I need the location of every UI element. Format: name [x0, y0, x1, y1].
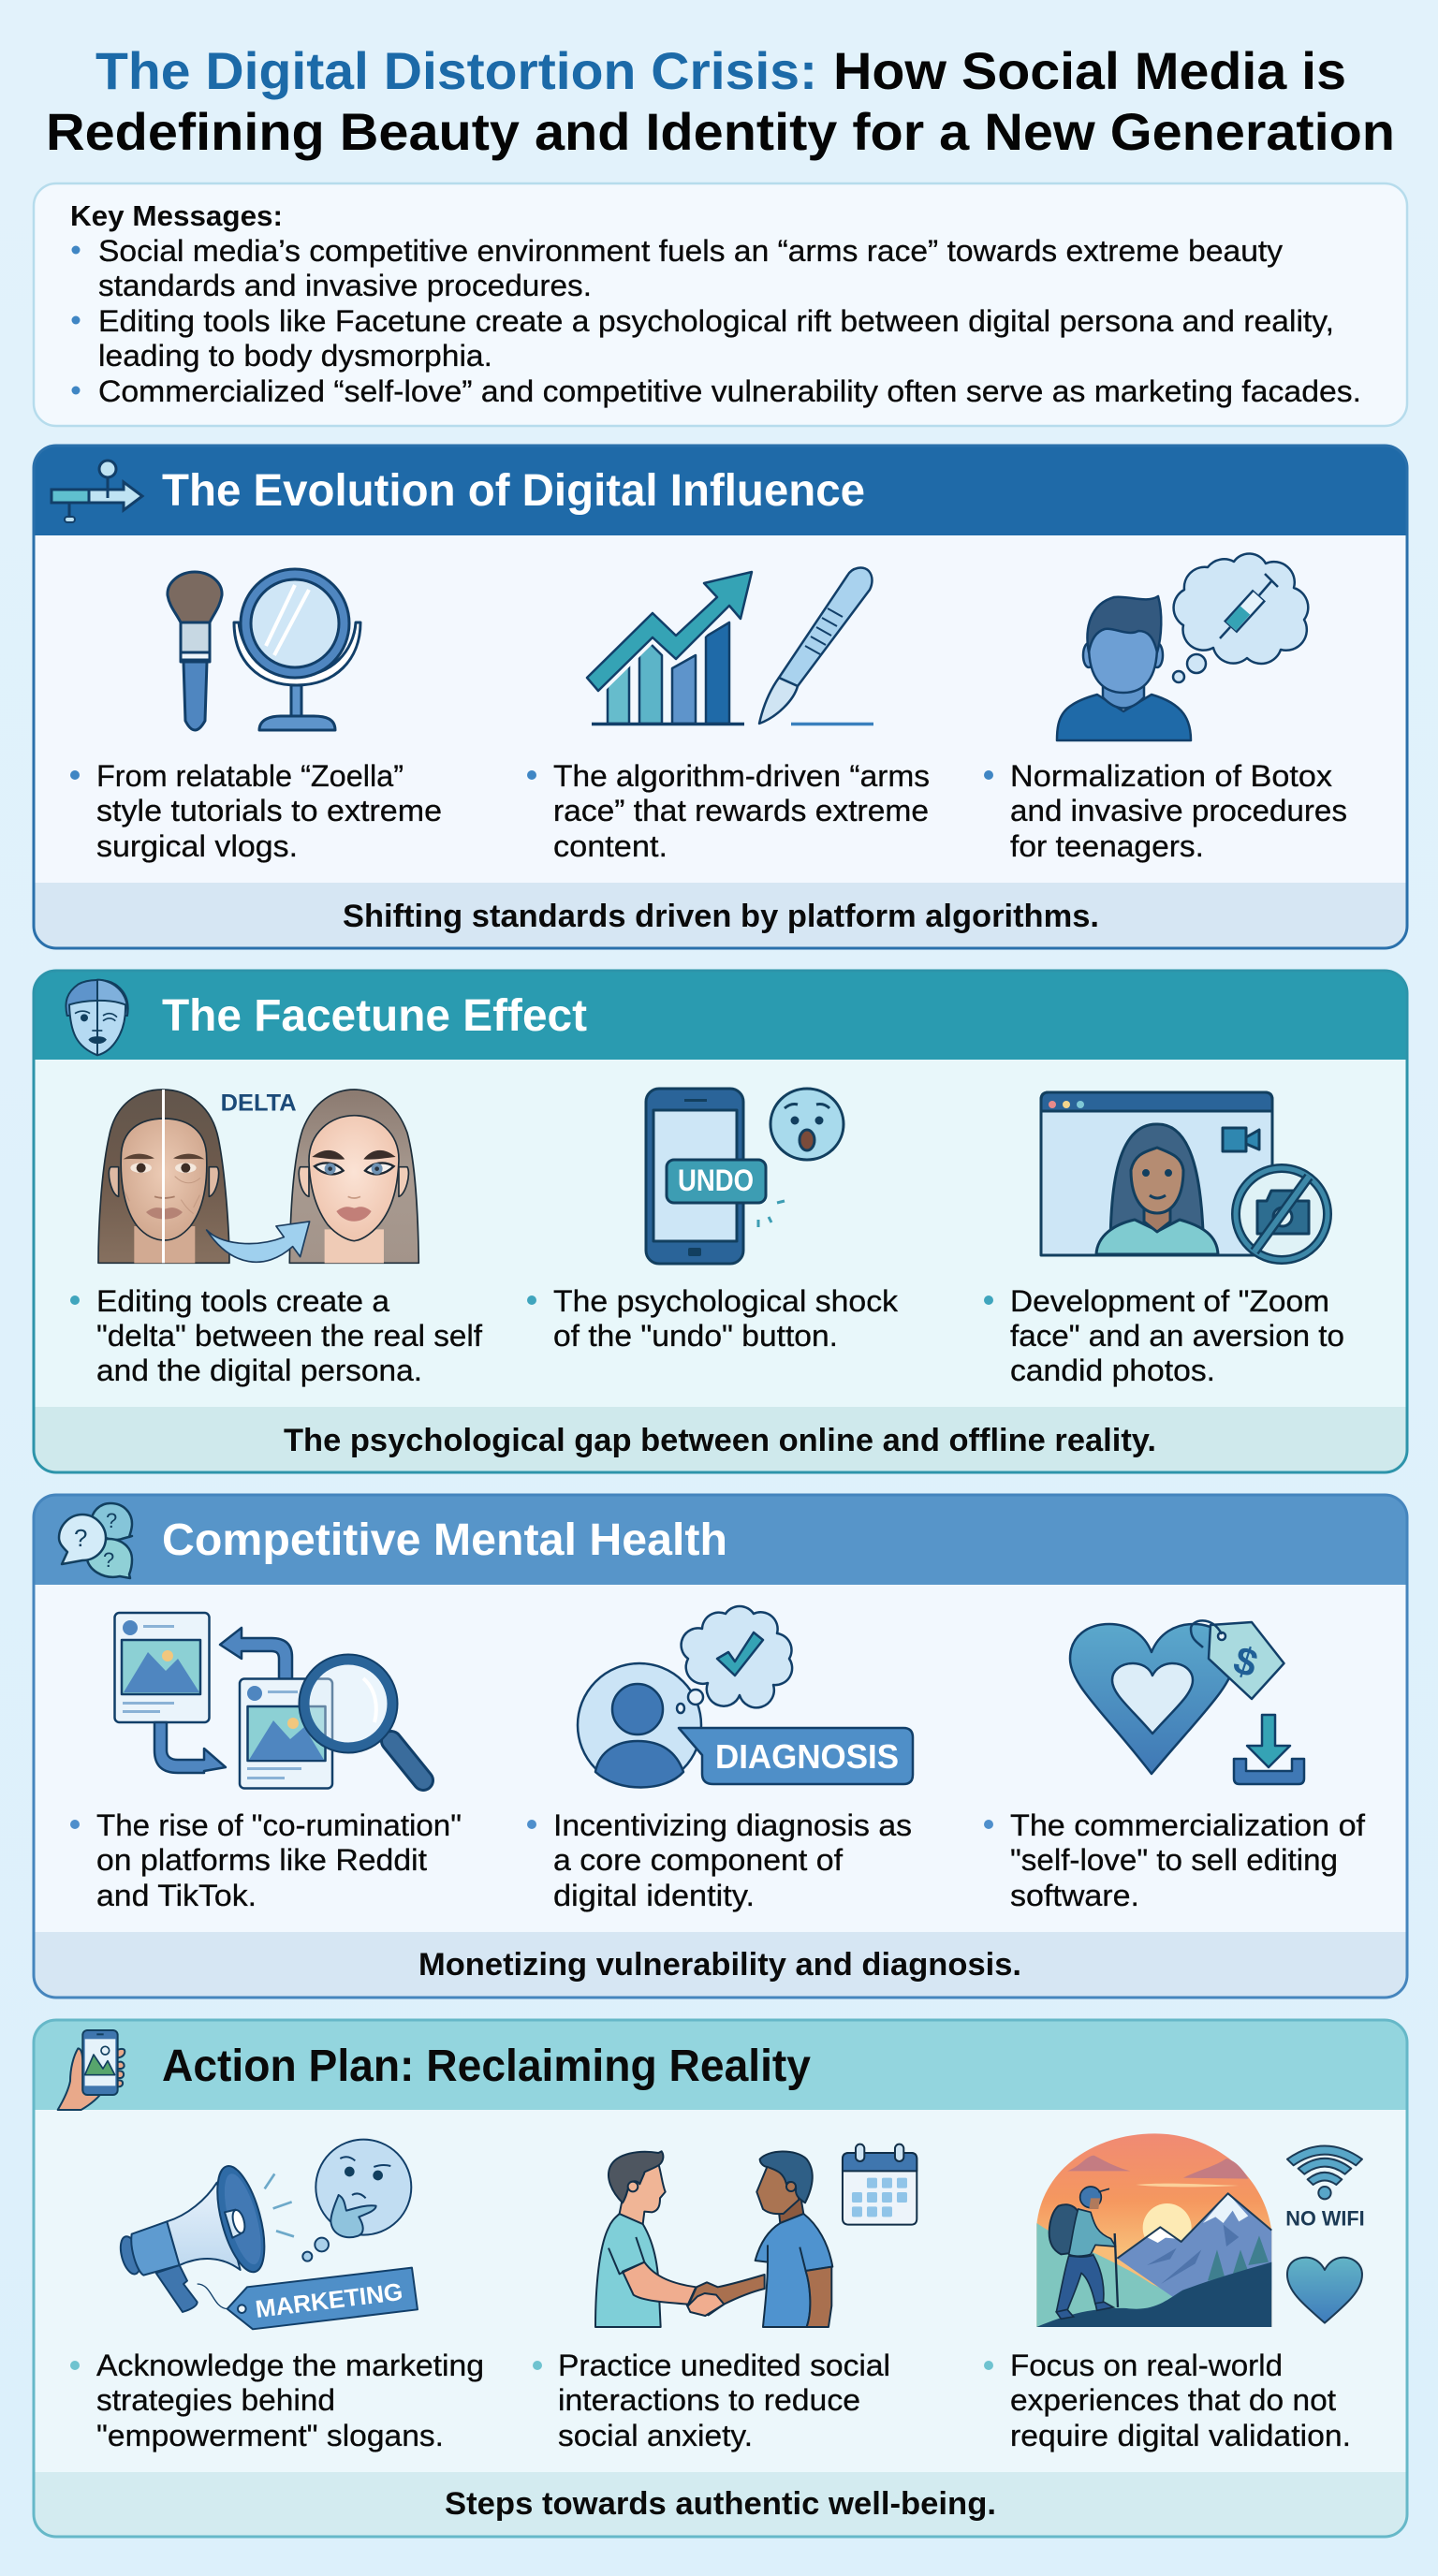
bullets: action column 3: experiences that do not — [1010, 2383, 1336, 2417]
bullets: facetune column 3: Development of "Zoom — [1010, 1284, 1329, 1318]
icon: split face — [66, 980, 128, 1055]
heading: Action Plan: Reclaiming Reality — [162, 2042, 811, 2091]
label: delta: DELTA — [221, 1090, 297, 1117]
icon: heart with price tag and download — [1070, 1620, 1304, 1784]
bullets: evolution column 3: and invasive procedures — [1010, 794, 1347, 827]
icon: question bubbles: ? — [106, 1509, 117, 1532]
panel: key messages: Social media’s competitive environment fuels an “arms race” towards extreme beauty — [98, 234, 1283, 268]
bullets: action column 2 — [533, 2349, 890, 2452]
icon: question bubbles: ? — [74, 1524, 87, 1552]
bullets: evolution column 1: surgical vlogs. — [96, 829, 298, 863]
icon: growth chart and scalpel — [587, 568, 873, 724]
panel: action plan — [34, 2020, 1407, 2537]
bullets: action column 1 — [70, 2349, 484, 2452]
bullets: evolution column 1 — [70, 759, 442, 863]
footer: The psychological gap between online and offline reality. — [284, 1423, 1156, 1458]
title: Redefining Beauty and Identity for a New Generation — [46, 102, 1395, 161]
bullets: competitive column 3: "self-love" to sell editing — [1010, 1843, 1338, 1877]
bullets: evolution column 2: content. — [553, 829, 668, 863]
icon: comparing posts with magnifier — [114, 1613, 423, 1788]
icon: teen thinking about injection — [1057, 553, 1308, 740]
panel: competitive mental health — [34, 1495, 1407, 1998]
bullets: evolution column 2 — [527, 759, 930, 863]
bullets: facetune column 2: The psychological shock — [553, 1284, 899, 1318]
bullets: facetune column 3: candid photos. — [1010, 1354, 1215, 1387]
bullets: competitive column 1: and TikTok. — [96, 1879, 257, 1912]
bullets: action column 1: strategies behind — [96, 2383, 335, 2417]
panel: key messages: Key Messages: — [70, 199, 283, 232]
bullets: facetune column 3 — [984, 1284, 1344, 1387]
heading: The Facetune Effect — [162, 991, 587, 1041]
bullets: facetune column 1: "delta" between the real self — [96, 1319, 482, 1353]
icon: makeup brush and mirror — [168, 569, 360, 730]
panel: key messages: Editing tools like Facetune create a psychological rift between digital persona and reality, — [98, 304, 1334, 338]
label: diagnosis: DIAGNOSIS — [715, 1737, 899, 1776]
icon: person with diagnosis label — [578, 1606, 913, 1788]
bullets: action column 3: require digital validation. — [1010, 2419, 1351, 2452]
footer: Steps towards authentic well-being. — [445, 2486, 996, 2522]
panel: the facetune effect — [34, 971, 1407, 1472]
bullets: evolution column 2: race” that rewards extreme — [553, 794, 929, 827]
label: marketing: MARKETING — [254, 2277, 404, 2323]
label: undo: UNDO — [678, 1164, 754, 1197]
icon: question bubbles — [59, 1503, 132, 1578]
panel: key messages: Commercialized “self-love” and competitive vulnerability often serve as marketing facades. — [98, 374, 1361, 408]
icon: heart with price tag and download: $ — [1228, 1637, 1263, 1686]
bullets: facetune column 3: face" and an aversion to — [1010, 1319, 1344, 1353]
panel: key messages: leading to body dysmorphia. — [98, 339, 492, 373]
bullets: competitive column 2: Incentivizing diagnosis as — [553, 1808, 912, 1842]
bullets: action column 1: "empowerment" slogans. — [96, 2419, 444, 2452]
bullets: action column 2: social anxiety. — [558, 2419, 753, 2452]
bullets: action column 1: Acknowledge the marketing — [96, 2349, 484, 2382]
bullets: evolution column 1: style tutorials to extreme — [96, 794, 442, 827]
bullets: competitive column 1: The rise of "co-rumination" — [96, 1808, 462, 1842]
panel: key messages — [34, 183, 1407, 426]
bullets: facetune column 1: Editing tools create a — [96, 1284, 389, 1318]
title: How Social Media is — [833, 41, 1346, 100]
bullets: competitive column 2: digital identity. — [553, 1879, 755, 1912]
bullets: evolution column 1: From relatable “Zoella” — [96, 759, 404, 793]
bullets: evolution column 2: The algorithm-driven “arms — [553, 759, 930, 793]
footer: Monetizing vulnerability and diagnosis. — [418, 1947, 1021, 1983]
icon: megaphone, skeptical face, marketing tag — [117, 2140, 418, 2329]
bullets: action column 2: interactions to reduce — [558, 2383, 860, 2417]
title — [46, 41, 1395, 161]
heading: The Evolution of Digital Influence — [162, 466, 865, 516]
heading: Competitive Mental Health — [162, 1515, 727, 1565]
icon: question bubbles: ? — [103, 1548, 114, 1572]
bullets: competitive column 1: on platforms like Reddit — [96, 1843, 427, 1877]
bullets: competitive column 1 — [70, 1808, 462, 1912]
label: no wifi: NO WIFI — [1285, 2207, 1365, 2231]
icon: real versus edited faces with delta — [98, 1090, 418, 1263]
bullets: action column 3 — [984, 2349, 1351, 2452]
bullets: facetune column 2 — [527, 1284, 899, 1353]
bullets: competitive column 3: The commercialization of — [1010, 1808, 1365, 1842]
bullets: evolution column 3: for teenagers. — [1010, 829, 1204, 863]
bullets: facetune column 1: and the digital persona. — [96, 1354, 422, 1387]
bullets: competitive column 2 — [527, 1808, 912, 1912]
bullets: evolution column 3: Normalization of Botox — [1010, 759, 1332, 793]
icon: phone with undo button — [646, 1089, 844, 1264]
bullets: action column 3: Focus on real-world — [1010, 2349, 1283, 2382]
icon: hand holding phone — [58, 2030, 125, 2110]
bullets: competitive column 3 — [984, 1808, 1365, 1912]
bullets: evolution column 3 — [984, 759, 1347, 863]
icon: handshake and calendar — [595, 2144, 917, 2327]
bullets: action column 2: Practice unedited social — [558, 2349, 890, 2382]
icon: timeline arrow — [51, 461, 142, 522]
bullets: competitive column 2: a core component of — [553, 1843, 843, 1877]
panel: the evolution of digital influence — [34, 446, 1407, 948]
bullets: facetune column 2: of the "undo" button. — [553, 1319, 838, 1353]
icon: hiker at sunset with no wifi and heart — [1036, 2133, 1365, 2327]
panel: key messages: standards and invasive procedures. — [98, 269, 592, 302]
bullets: facetune column 1 — [70, 1284, 482, 1387]
icon: video call window with no camera — [1041, 1092, 1328, 1260]
bullets: competitive column 3: software. — [1010, 1879, 1139, 1912]
title: The Digital Distortion Crisis: — [95, 41, 817, 100]
footer: Shifting standards driven by platform algorithms. — [343, 899, 1099, 934]
